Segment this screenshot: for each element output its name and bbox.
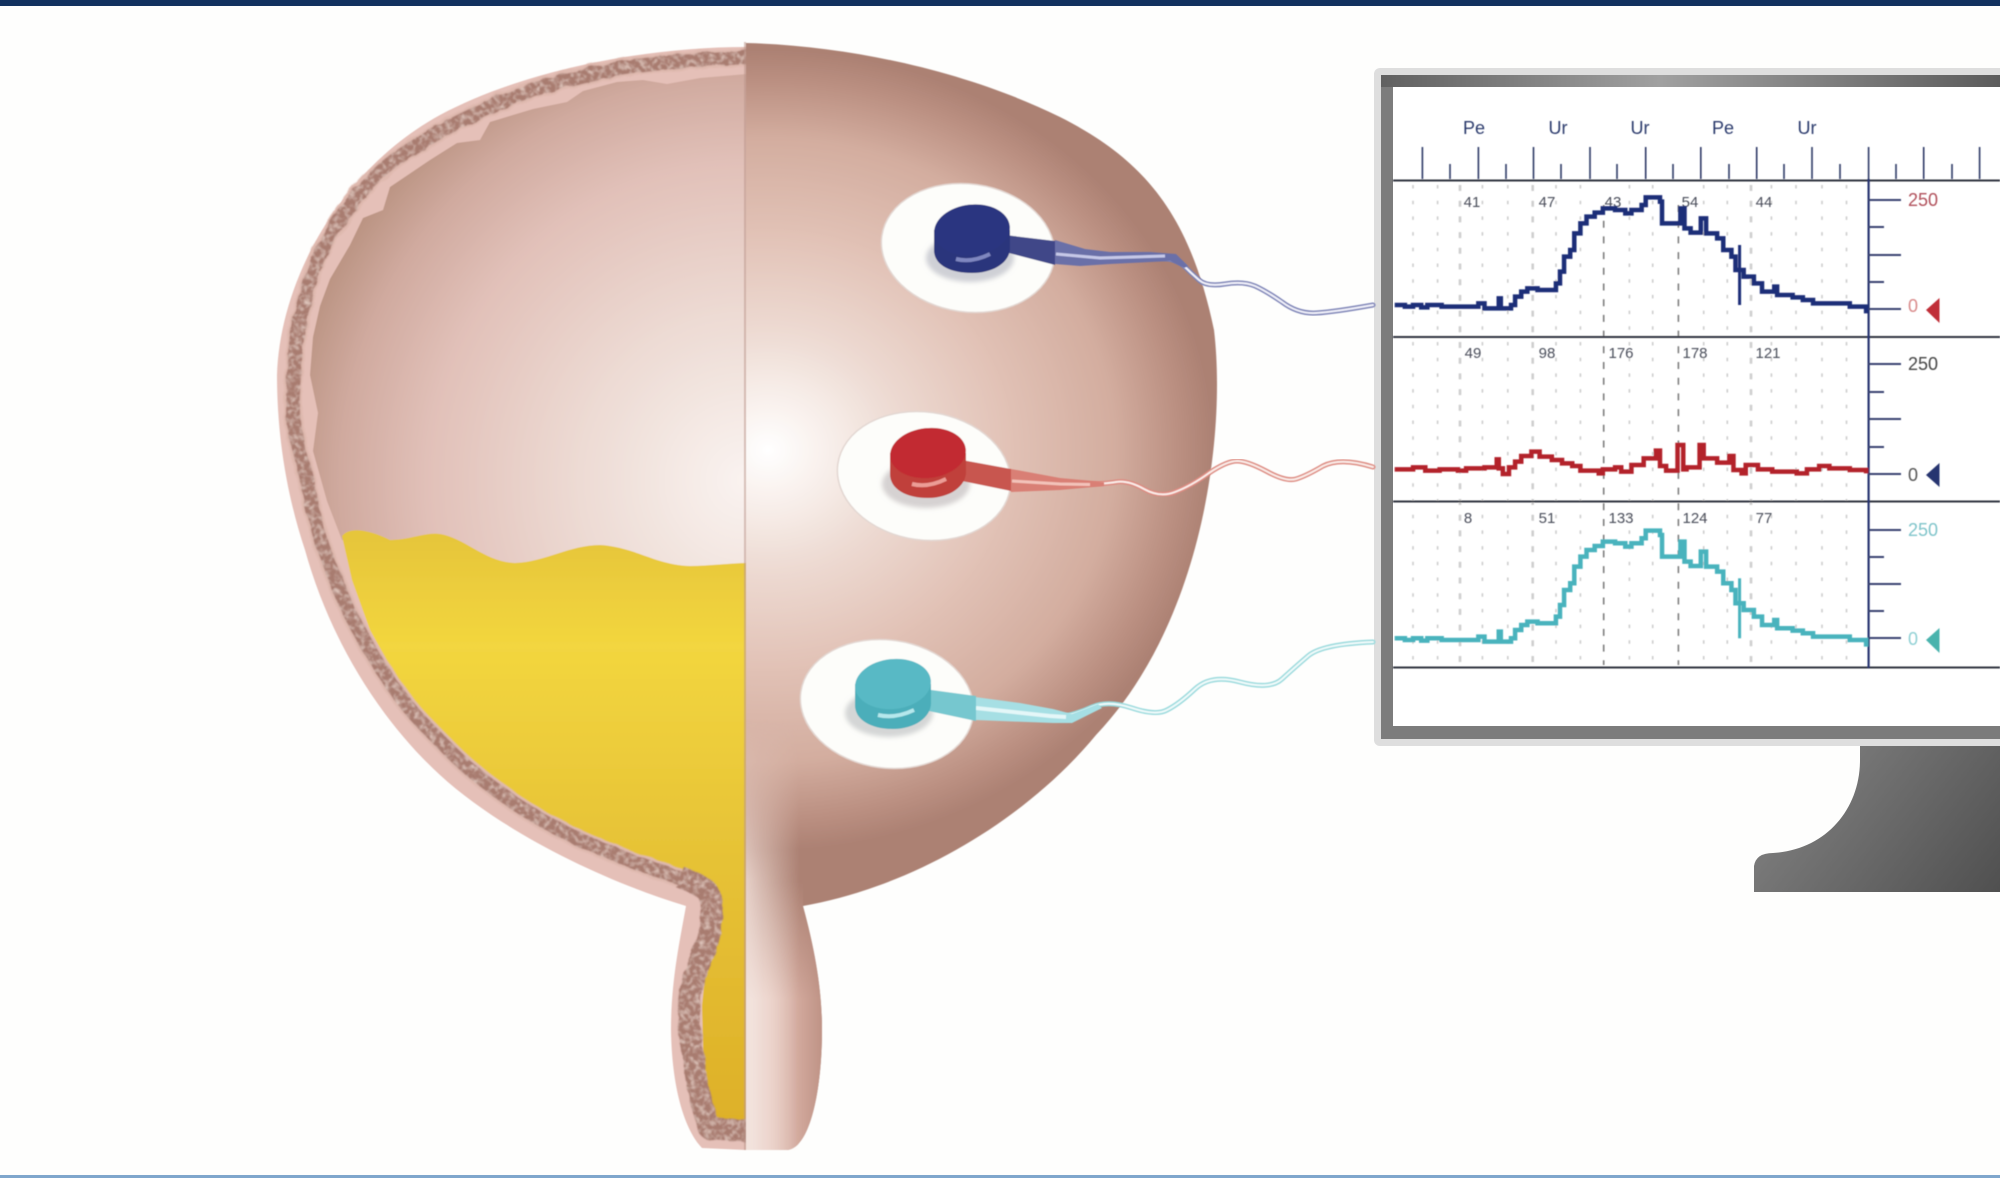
row 2 values: 121	[1755, 345, 1781, 362]
row 1 values: 43	[1605, 194, 1621, 211]
adhesive patch	[792, 629, 982, 779]
disc highlight	[878, 710, 914, 716]
trace: red	[1395, 445, 1866, 474]
stand joint cover	[1860, 726, 2000, 739]
bladder illustration	[277, 42, 1217, 1150]
lower edge highlight	[745, 750, 795, 1150]
stem	[924, 689, 976, 721]
disc top	[888, 424, 968, 482]
wire: teal	[976, 642, 1373, 718]
bladder exterior: right half	[745, 42, 1217, 1150]
vertical scale axis	[1867, 179, 1870, 668]
muscle band	[293, 57, 748, 1131]
row 1 values: 54	[1682, 194, 1698, 211]
connector sleeve	[975, 697, 1102, 723]
row 3 values: 124	[1682, 510, 1708, 527]
marker: teal triangle	[1926, 628, 1940, 653]
bezel top highlight	[1381, 75, 2000, 87]
scale ticks	[1868, 200, 1901, 638]
marker: navy triangle	[1926, 463, 1940, 487]
electrode wires	[976, 255, 1373, 718]
dotted time grid	[1413, 185, 1846, 665]
electrode: teal	[792, 629, 1102, 779]
top navy bar	[0, 0, 2000, 6]
trace: navy	[1395, 197, 1866, 313]
disc side	[855, 684, 931, 729]
scale labels: row 2	[1908, 354, 1940, 487]
trace: teal	[1395, 531, 1866, 647]
row 2 values: 98	[1539, 345, 1555, 362]
bottom blue rule	[0, 1175, 2000, 1178]
urethra shading	[746, 900, 822, 1150]
scale labels: row 3: 0	[1908, 629, 1918, 649]
electrode: navy	[873, 173, 1188, 323]
urine	[342, 530, 748, 1125]
row 1 values: 47	[1539, 194, 1555, 211]
scale labels: row 2: 0	[1908, 465, 1918, 485]
stem	[1005, 235, 1055, 265]
muscle wall	[293, 57, 748, 1131]
scale labels: row 3: 250	[1908, 520, 1938, 540]
row 2 values	[1465, 345, 1781, 362]
midline seam	[744, 42, 746, 1150]
exterior surface	[746, 43, 1217, 1150]
time ruler	[1422, 147, 1980, 179]
row 3 values: 133	[1608, 510, 1634, 527]
disc highlight	[956, 254, 990, 260]
disc side	[934, 230, 1010, 273]
disc side	[890, 453, 966, 498]
event labels: Ur	[1798, 118, 1816, 138]
row 1 values: 41	[1464, 194, 1480, 211]
frame outer glow	[1374, 68, 2000, 746]
stem	[962, 460, 1011, 491]
row 1 values	[1464, 194, 1772, 211]
event labels	[1463, 118, 1816, 138]
event labels: Pe	[1712, 118, 1734, 138]
marker: red triangle	[1926, 298, 1940, 323]
row 3 values: 8	[1464, 510, 1472, 527]
disc highlight	[912, 479, 946, 485]
scale labels: row 2: 250	[1908, 354, 1938, 374]
electrode: red	[829, 401, 1104, 551]
row 1 values: 44	[1756, 194, 1772, 211]
row 2 values: 49	[1465, 345, 1481, 362]
scale labels: row 1: 0	[1908, 296, 1918, 316]
disc top	[853, 655, 933, 713]
connector sleeve	[1011, 469, 1104, 492]
adhesive patch	[873, 173, 1063, 323]
bladder cross-section: left half	[277, 47, 748, 1150]
event labels: Pe	[1463, 118, 1485, 138]
monitor frame	[1374, 68, 2000, 746]
monitor stand	[1754, 735, 2000, 892]
row 2 values: 178	[1682, 345, 1708, 362]
outer wall	[277, 47, 746, 1150]
bladder cavity	[310, 74, 747, 600]
wire: red	[1011, 461, 1373, 494]
event labels: Ur	[1630, 118, 1650, 138]
row 2 values: 176	[1608, 345, 1634, 362]
row 3 values: 51	[1539, 510, 1555, 527]
scale labels: row 3	[1908, 520, 1940, 653]
wall lining	[293, 57, 748, 878]
scale labels: row 1: 250	[1908, 190, 1938, 210]
row 3 values: 77	[1756, 510, 1772, 527]
row 3 values	[1464, 510, 1772, 527]
wire: navy	[1055, 255, 1373, 313]
adhesive patch	[829, 401, 1019, 551]
scale labels: row 1	[1908, 190, 1940, 323]
screen	[1393, 87, 2000, 726]
disc top	[932, 201, 1012, 259]
connector sleeve	[1055, 240, 1188, 268]
frame bezel	[1381, 75, 2000, 739]
chart on monitor screen	[1393, 118, 2000, 668]
row dividers	[1393, 180, 2000, 668]
event labels: Ur	[1548, 118, 1568, 138]
